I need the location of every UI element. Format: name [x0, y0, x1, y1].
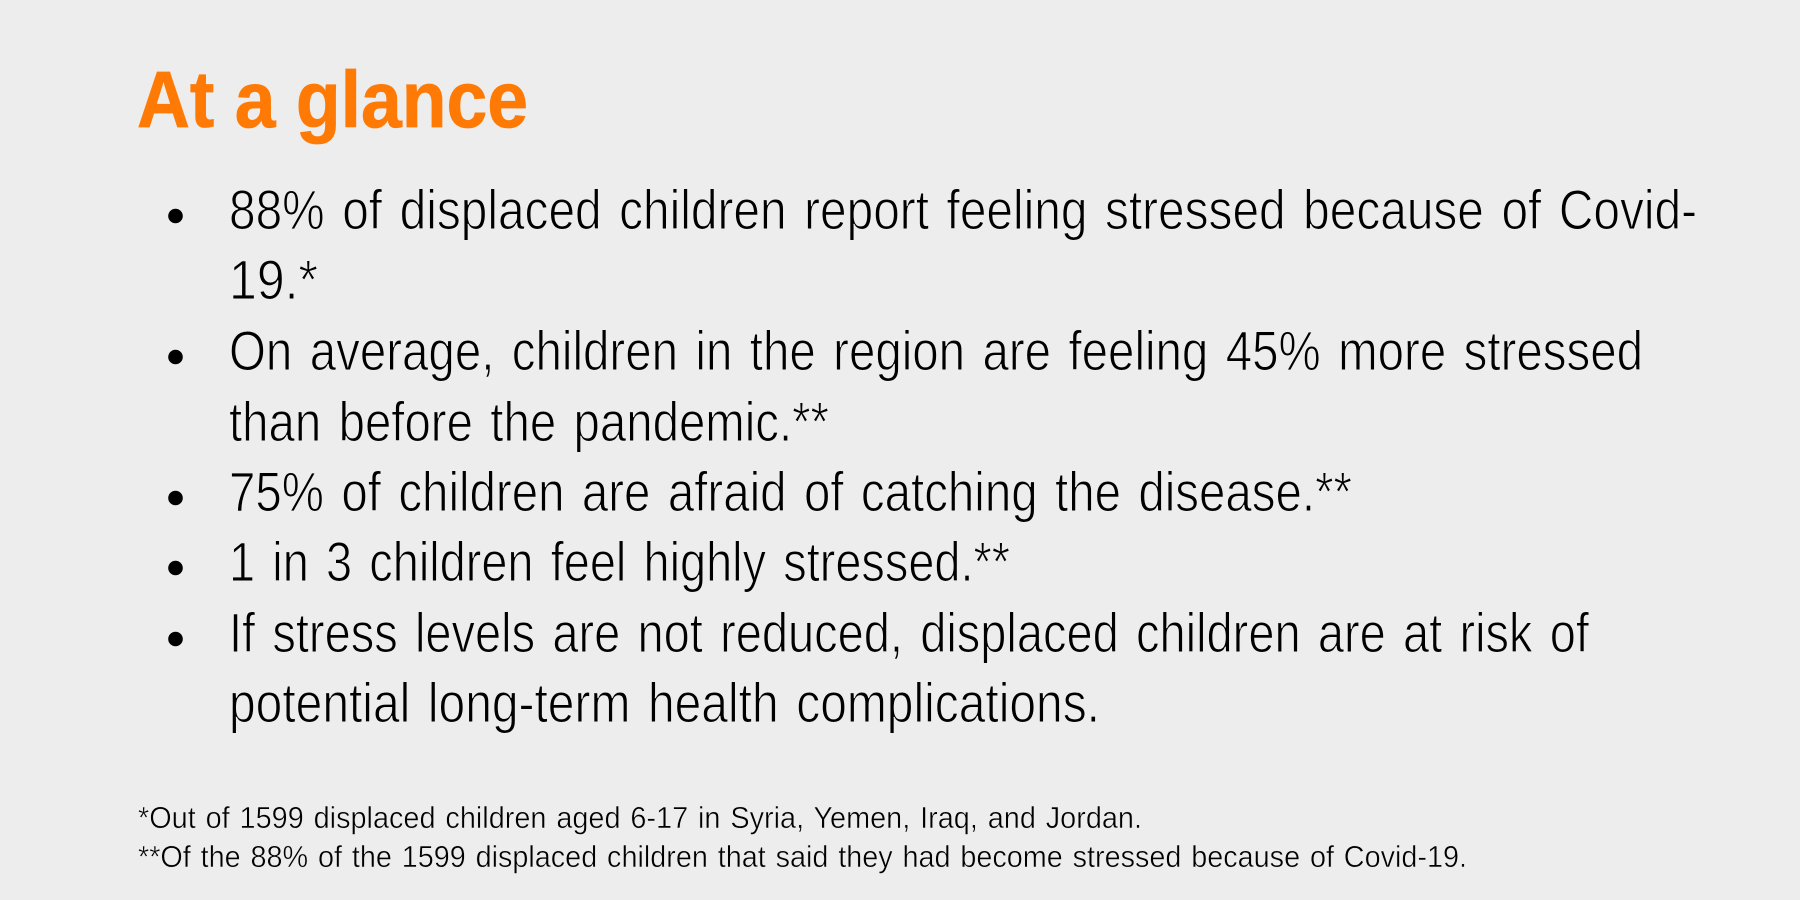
bullet item 1: 19.*: [229, 248, 318, 311]
footnotes: **Of the 88% of the 1599 displaced children that said they had become stressed because of Covid-19.: [138, 839, 1467, 874]
bullet item 2: [168, 319, 1643, 453]
bullet list: [168, 178, 1697, 734]
bullet item 2: than before the pandemic.**: [229, 390, 829, 453]
bullet item 5: potential long-term health complications.: [229, 671, 1100, 734]
footnotes: *Out of 1599 displaced children aged 6-17 in Syria, Yemen, Iraq, and Jordan.: [138, 800, 1142, 835]
bullet item 3: 75% of children are afraid of catching the disease.**: [229, 460, 1352, 523]
footnotes: [138, 800, 1467, 874]
bullet item 4: 1 in 3 children feel highly stressed.**: [229, 530, 1010, 593]
title: At a glance: [137, 55, 528, 144]
bullet item 1: [168, 178, 1697, 311]
bullet item 5: [168, 601, 1589, 734]
